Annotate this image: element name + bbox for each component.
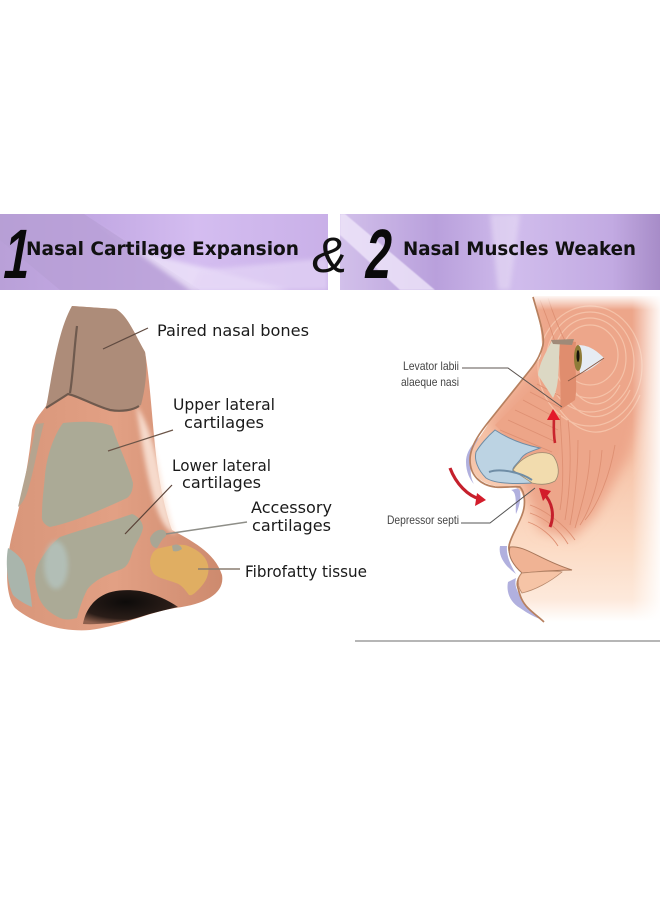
fibrofatty tissue — [150, 545, 208, 595]
nose cartilage — [475, 430, 540, 483]
label: upper lateral cartilages: Upper lateral — [173, 395, 275, 414]
levator strands — [500, 298, 615, 546]
heading: Nasal Muscles Weaken: Nasal Muscles Weaken — [403, 238, 636, 260]
upper lateral cartilage — [42, 422, 133, 527]
accessory cartilage — [150, 530, 182, 551]
label: accessory cartilages: cartilages — [252, 516, 331, 535]
label: lower lateral cartilages: cartilages — [182, 473, 261, 492]
left upper cartilage strip — [18, 423, 44, 507]
central muscle band — [559, 340, 576, 410]
brow band — [551, 339, 574, 345]
label: levator labii alaeque nasi: alaeque nasi — [401, 375, 459, 389]
iris — [574, 345, 582, 371]
arrow: depressor downward — [450, 468, 486, 506]
label: accessory cartilages — [166, 498, 332, 535]
banner: nasal cartilage expansion — [0, 214, 328, 293]
ampersand: & — [312, 227, 347, 283]
lower cartilage blue highlight — [44, 541, 68, 589]
label: fibrofatty tissue: Fibrofatty tissue — [245, 562, 367, 581]
lower lateral cartilage — [35, 514, 143, 620]
label: accessory cartilages: Accessory — [251, 498, 332, 517]
nose skin shape — [7, 306, 222, 630]
label: upper lateral cartilages: cartilages — [184, 413, 264, 432]
label: paired nasal bones: Paired nasal bones — [157, 321, 309, 340]
muscle and cartilage clip group — [475, 296, 650, 546]
eyelid crease — [568, 358, 604, 381]
arrow: upward levator — [547, 409, 560, 443]
bone suture — [46, 326, 139, 411]
heading: Nasal Cartilage Expansion: Nasal Cartilage Expansion — [26, 238, 299, 260]
bridge bone — [538, 340, 560, 398]
illustration: face profile with nasal muscles — [465, 296, 660, 622]
nasal bone — [46, 306, 146, 410]
skin base — [465, 296, 660, 622]
numeral 2: 2 — [361, 215, 398, 293]
label: levator labii alaeque nasi — [401, 359, 562, 407]
lower nose muscle — [496, 423, 500, 430]
nostril — [83, 590, 178, 624]
profile shadow — [466, 426, 545, 620]
left alar cartilage — [7, 548, 32, 607]
right side fade — [632, 296, 660, 622]
label: depressor septi: Depressor septi — [387, 513, 459, 527]
top fade — [533, 296, 660, 310]
label: upper lateral cartilages — [108, 395, 275, 451]
label: lower lateral cartilages — [125, 456, 271, 534]
profile outline — [470, 297, 544, 622]
fat pad — [513, 453, 558, 484]
alar rim — [489, 470, 532, 480]
lips — [509, 547, 572, 593]
arrow: depressor upward — [539, 488, 552, 527]
illustration: nose anatomy front view — [7, 306, 222, 630]
banner: nasal muscles weaken — [340, 214, 660, 293]
orbicularis rings — [538, 306, 642, 432]
label: levator labii alaeque nasi: Levator labii — [403, 359, 459, 373]
pupil — [576, 350, 580, 362]
labels: nose anatomy — [103, 321, 367, 581]
label: lower lateral cartilages: Lower lateral — [172, 456, 271, 475]
label: paired nasal bones — [103, 321, 309, 349]
eye white — [578, 345, 604, 374]
right skin highlight — [136, 405, 176, 534]
label: depressor septi — [387, 488, 535, 527]
muscle mass — [490, 296, 650, 538]
